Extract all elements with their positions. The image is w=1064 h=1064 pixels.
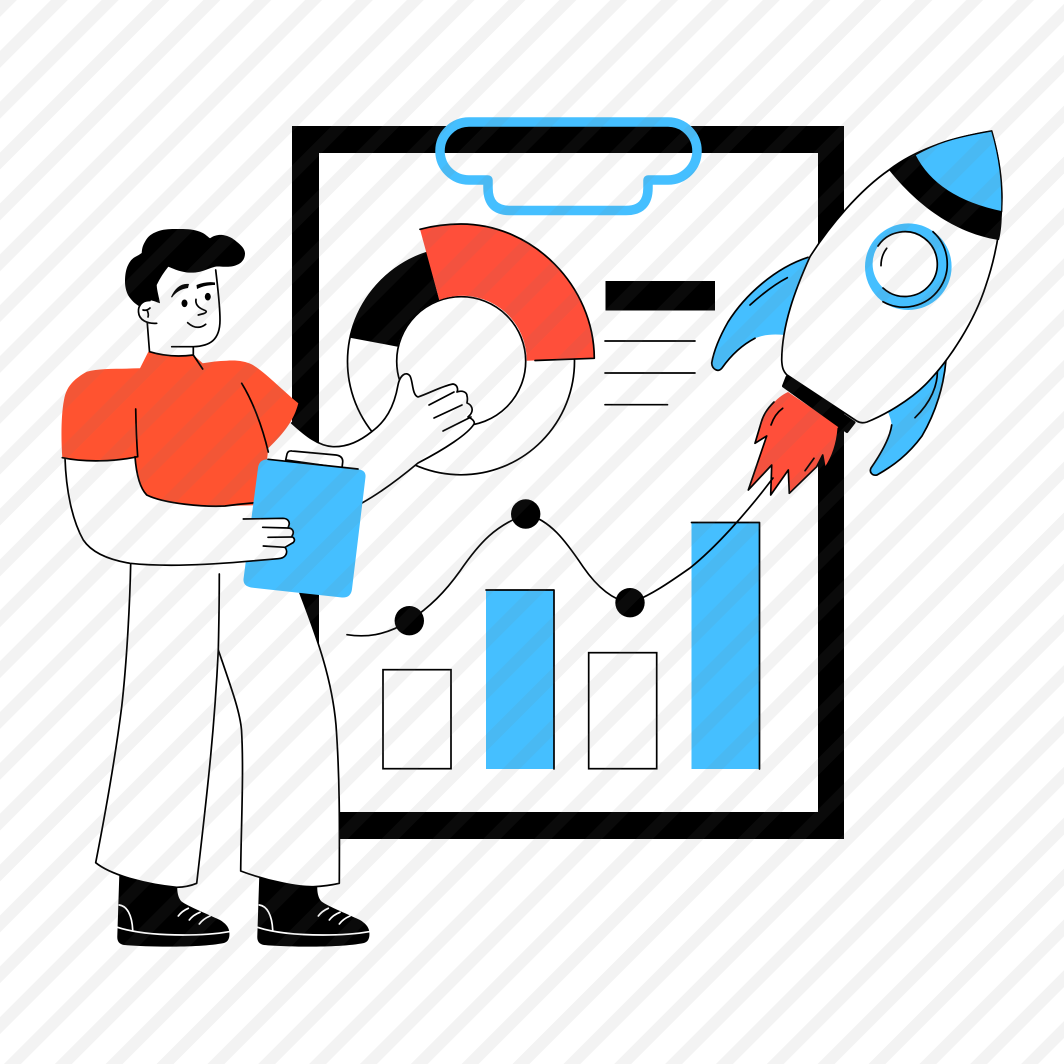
left fin (712, 257, 812, 370)
legend heading bar and lines (605, 281, 715, 405)
neck and face (147, 270, 220, 369)
shirt (61, 352, 298, 506)
nose band (889, 155, 1002, 240)
bar 1 (383, 670, 451, 769)
ear (138, 300, 160, 323)
bar 2 (486, 590, 554, 769)
left shoe (117, 875, 229, 947)
point 1 (395, 606, 424, 635)
donut chart (348, 224, 594, 475)
donut base ring (348, 248, 574, 475)
engine collar (784, 377, 854, 432)
right arm and pointing hand (262, 374, 474, 525)
eyebrows (171, 282, 215, 298)
donut black segment (350, 252, 439, 347)
window (865, 223, 952, 310)
nose and mouth (188, 299, 206, 327)
donut inner circle (397, 297, 526, 426)
clipboard board frame (292, 126, 844, 839)
bar 3 (589, 653, 657, 769)
right shoe (257, 875, 369, 947)
clipboard clip (440, 122, 697, 210)
trend curve (347, 478, 773, 636)
bar 4 (692, 522, 760, 769)
trousers (96, 560, 339, 887)
person (61, 229, 474, 947)
left arm (65, 458, 262, 565)
handheld clipboard clip (286, 451, 343, 468)
rocket (712, 131, 1002, 495)
nose cone (915, 131, 1002, 212)
right fin (870, 360, 946, 475)
donut red segment (420, 224, 594, 361)
handheld clipboard (243, 459, 366, 598)
red segment outline (420, 224, 594, 360)
flame (748, 392, 838, 495)
point 3 (615, 588, 645, 617)
hand holding clipboard (235, 518, 294, 562)
trend line with points (347, 478, 773, 636)
eyes (182, 293, 211, 307)
hair (125, 229, 245, 307)
bar chart (383, 522, 760, 769)
point 2 (511, 499, 540, 529)
rocket body (782, 131, 1002, 423)
